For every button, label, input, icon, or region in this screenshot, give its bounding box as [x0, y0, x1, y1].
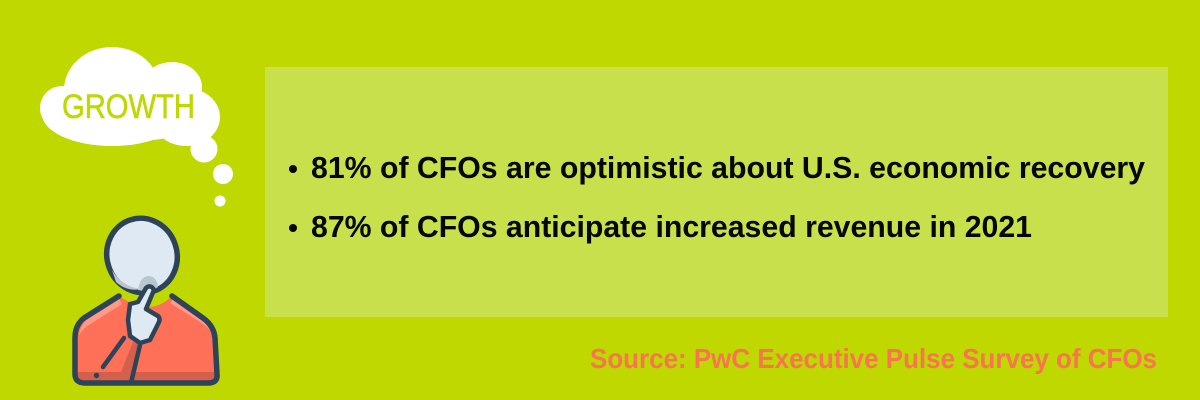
- icon: thinking person: [75, 209, 217, 383]
- source note: Source: PwC Executive Pulse Survey of CFOs: [590, 343, 1157, 374]
- head: [97, 209, 187, 302]
- thought bubble: [40, 47, 233, 206]
- panel: key findings: [265, 67, 1168, 317]
- bullet 1: 81% of CFOs are optimistic about U.S. economic recovery: [311, 150, 1146, 185]
- bullet list: [289, 150, 1146, 244]
- arm lines: [103, 338, 140, 383]
- bullet 2: 87% of CFOs anticipate increased revenue in 2021: [311, 209, 1032, 244]
- icon: cloud: [40, 47, 233, 206]
- body: [75, 296, 217, 383]
- hand: [128, 286, 160, 343]
- cloud label: GROWTH: [62, 88, 195, 126]
